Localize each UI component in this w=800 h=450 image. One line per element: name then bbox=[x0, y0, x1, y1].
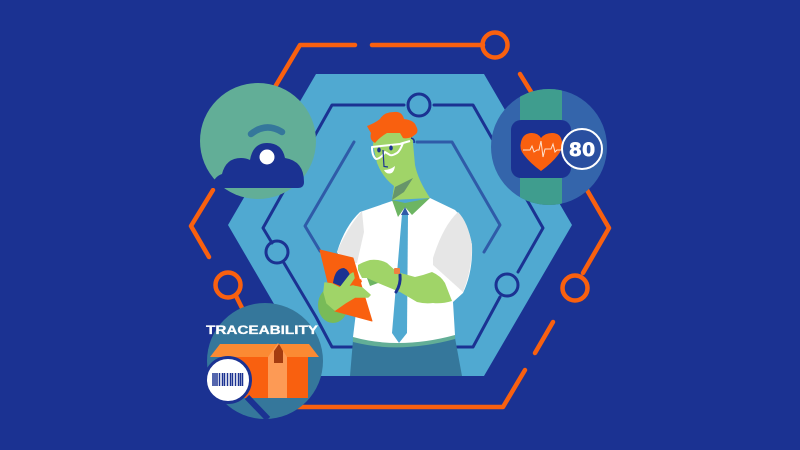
box flaps bbox=[210, 344, 319, 357]
right arm bbox=[358, 260, 452, 303]
shirt bbox=[337, 198, 472, 343]
infographic illustration bbox=[188, 30, 612, 419]
box body bbox=[223, 357, 308, 398]
magnifier handle bbox=[247, 397, 268, 419]
cloud circle background bbox=[200, 83, 316, 199]
barcode bbox=[213, 373, 242, 386]
hand shadow back bbox=[318, 287, 348, 323]
wrist watch face bbox=[394, 268, 400, 274]
light blue hexagon bbox=[228, 74, 572, 376]
smile bbox=[384, 166, 395, 174]
magnifier lens bbox=[206, 358, 250, 402]
icon: magnifier with barcode bbox=[206, 358, 268, 419]
trousers bbox=[350, 338, 462, 376]
hair bbox=[367, 112, 418, 143]
wrist watch bbox=[396, 275, 400, 292]
person bbox=[318, 112, 472, 376]
left hand bbox=[324, 273, 370, 310]
tablet navy button bbox=[333, 268, 351, 288]
shirt collar bbox=[392, 198, 430, 217]
eyes and nose bbox=[377, 138, 414, 167]
box centre strip bbox=[268, 343, 287, 398]
watch circle background bbox=[491, 89, 607, 205]
finger shadow bbox=[367, 278, 378, 286]
circuit: inner mid-blue lines bbox=[305, 142, 500, 252]
shirt sleeve shadow right bbox=[433, 212, 472, 292]
shirt sleeve shadow left bbox=[337, 211, 364, 263]
neck shadow bbox=[392, 178, 413, 200]
panel: traceability bbox=[206, 303, 323, 419]
orange circuit lines and nodes bbox=[191, 32, 609, 407]
icon: cloud dot bbox=[260, 150, 274, 164]
heading: TRACEABILITY bbox=[206, 323, 318, 337]
heart rate badge: 80 bbox=[569, 139, 595, 161]
box tape bbox=[274, 344, 283, 363]
traceability circle background bbox=[207, 303, 323, 419]
tablet bbox=[320, 250, 372, 321]
icon: cloud bbox=[212, 143, 304, 188]
panel: smartwatch heart rate bbox=[491, 85, 607, 210]
finger gap bbox=[353, 279, 362, 286]
watch face bbox=[511, 120, 571, 178]
circuit: navy hexagon lines with nodes bbox=[263, 94, 543, 347]
tie knot bbox=[401, 207, 409, 215]
icon: wifi arc bbox=[251, 127, 282, 134]
waistband bbox=[353, 334, 455, 347]
neck and face bbox=[373, 130, 430, 200]
icon: cardboard box bbox=[210, 343, 319, 398]
glasses bbox=[372, 141, 410, 159]
icon: heart bbox=[520, 133, 562, 171]
panel: cloud connectivity bbox=[200, 83, 316, 199]
watch strap bbox=[520, 85, 562, 210]
heartbeat line bbox=[523, 141, 563, 157]
necktie bbox=[392, 214, 408, 343]
